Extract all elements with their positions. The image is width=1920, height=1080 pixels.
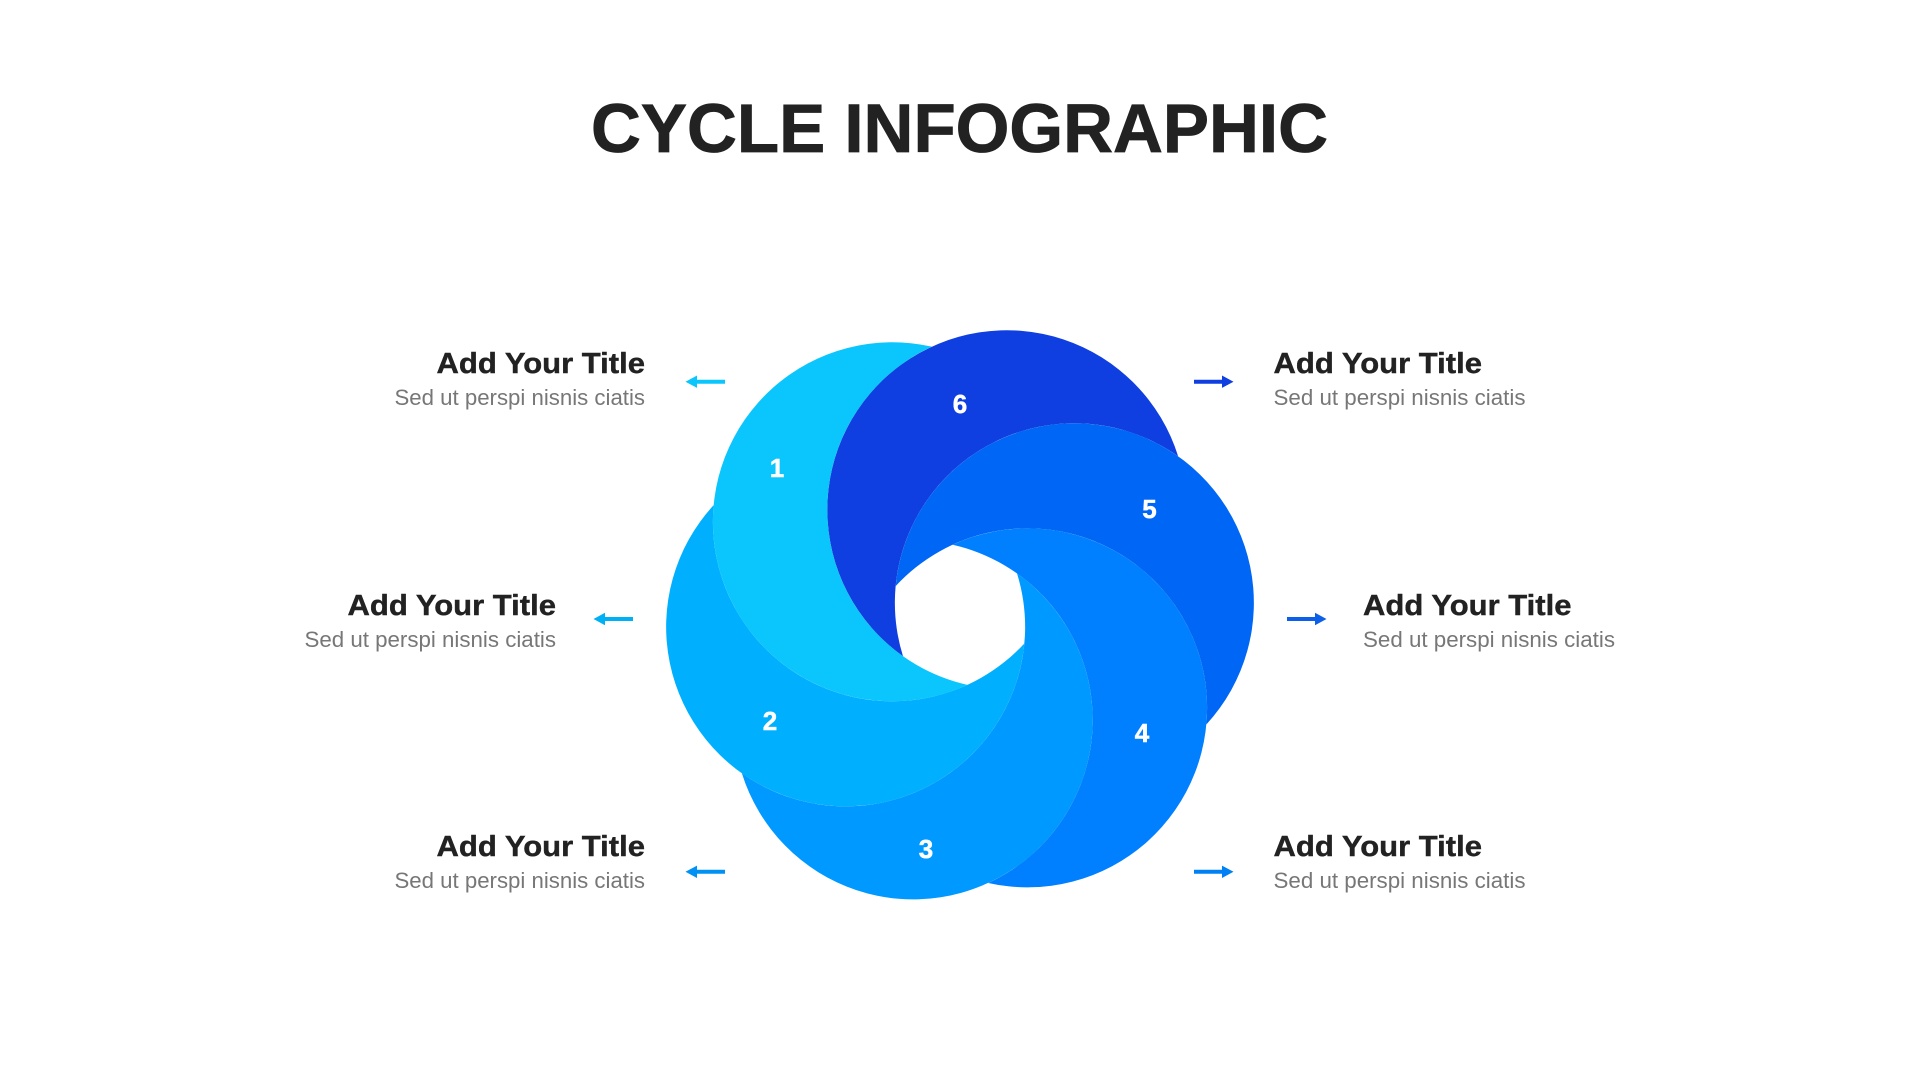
text block: top left: Sed ut perspi nisnis ciatis [394,385,645,410]
text block: middle left: Sed ut perspi nisnis ciatis [304,627,556,652]
segment 6 [827,330,1178,656]
arrow: middle left [594,613,633,625]
text block: bottom left [394,831,645,893]
text block: top right: Sed ut perspi nisnis ciatis [1274,385,1526,410]
number 4: 4 [1135,718,1150,748]
segment 2 [666,505,1024,806]
text block: middle right [1363,590,1615,652]
text block: middle left: Add Your Title [348,590,556,622]
segment 3 [742,573,1093,899]
text block: bottom left: Sed ut perspi nisnis ciatis [394,868,645,893]
text block: middle right: Sed ut perspi nisnis ciatis [1363,627,1615,652]
text block: bottom right: Sed ut perspi nisnis ciatis [1274,868,1526,893]
text block: top left [394,348,645,410]
text block: bottom right: Add Your Title [1274,831,1482,863]
segment 4 [953,528,1207,887]
number 3: 3 [919,834,933,864]
number 1: 1 [770,453,784,483]
number 5: 5 [1142,494,1157,524]
number 2: 2 [763,706,777,736]
arrow: bottom right [1194,866,1234,878]
cycle diagram [666,330,1254,899]
text block: top left: Add Your Title [436,348,645,380]
segment 1 [713,342,967,701]
arrow: top right [1194,376,1234,388]
arrow: bottom left [686,866,725,878]
number 6: 6 [953,389,967,419]
arrow: top left [686,376,725,388]
text block: middle left [304,590,556,652]
text block: middle right: Add Your Title [1363,590,1572,622]
text block: bottom right [1274,831,1526,893]
segment 5 [896,423,1254,724]
text block: top right [1274,348,1526,410]
arrow: middle right [1287,613,1326,625]
text block: bottom left: Add Your Title [436,831,645,863]
title: CYCLE INFOGRAPHIC [591,90,1328,167]
text block: top right: Add Your Title [1274,348,1482,380]
